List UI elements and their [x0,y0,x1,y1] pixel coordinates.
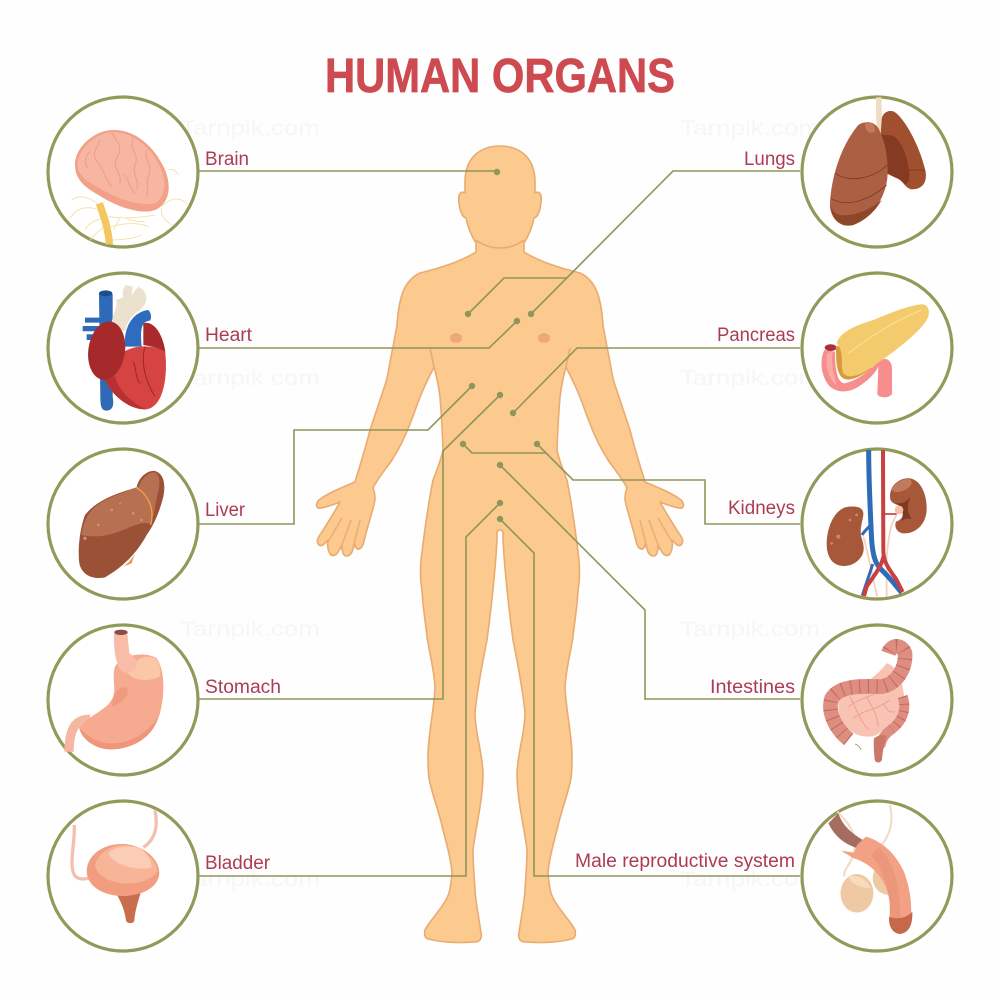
text: Tarnpik.com [180,117,320,140]
label: heart: Heart [205,325,253,346]
human body silhouette [317,146,683,943]
panel: kidneys [802,449,952,599]
connection dots [460,169,540,522]
label: intestines: Intestines [710,677,795,698]
text: Tarnpik.com [180,618,320,641]
text: Tarnpik.com [680,618,820,641]
text: Tarnpik.com [680,367,820,390]
label: kidneys: Kidneys [728,498,795,519]
panel: brain [48,97,198,247]
panel: stomach [48,625,198,775]
label: liver: Liver [205,500,246,521]
text: Tarnpik.com [180,868,320,891]
panel: intestines [802,625,952,775]
text: Tarnpik.com [680,868,820,891]
panel: liver [48,449,198,599]
label: pancreas: Pancreas [717,325,795,346]
panel: lungs [802,97,952,247]
panel: bladder [48,801,198,951]
label: brain: Brain [205,149,249,170]
label: stomach: Stomach [205,677,281,698]
title: HUMAN ORGANS [325,50,675,103]
text: Tarnpik.com [680,117,820,140]
label: male reproductive system: Male reproductive system [575,851,795,872]
label: bladder: Bladder [205,853,271,874]
label: lungs: Lungs [744,149,795,170]
leader lines [198,171,800,876]
panel: heart [48,273,198,423]
text: Tarnpik.com [180,367,320,390]
panel: pancreas [802,273,952,423]
panel: male reproductive system [802,801,952,951]
